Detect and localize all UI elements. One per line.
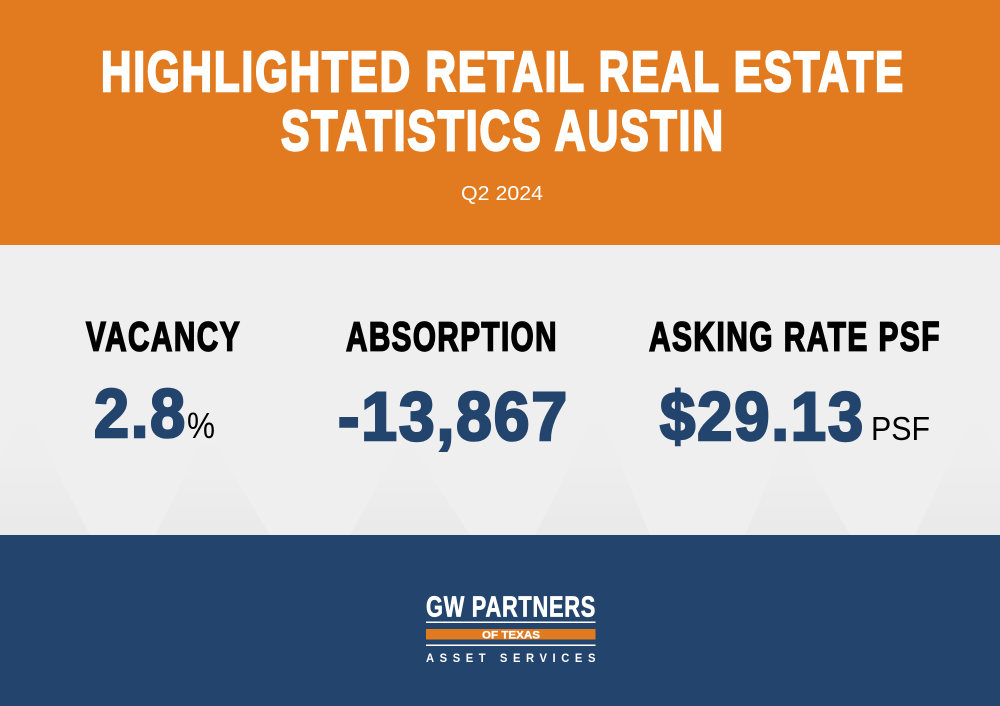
panel: statistics [0,245,1000,535]
absorption value: -13,867 [338,378,569,455]
vacancy unit: % [187,405,215,446]
stat: vacancy [86,314,241,452]
title [101,40,905,163]
panel: footer [0,535,1000,706]
asking rate unit: PSF [871,410,930,447]
logo tagline: ASSET SERVICES [426,651,601,665]
stat: absorption [338,314,569,455]
panel: header [0,0,1000,245]
vacancy value: 2.8 [94,375,187,452]
logo orange band [426,629,596,640]
logo: GW Partners of Texas: OF TEXAS [482,630,540,642]
absorption heading: ABSORPTION [346,314,558,360]
vacancy heading: VACANCY [86,314,241,360]
stat: asking rate [649,314,941,455]
logo wordmark: GW PARTNERS [426,592,596,624]
title: STATISTICS AUSTIN [281,99,725,163]
asking rate value: $29.13 [660,378,865,455]
background triangles [0,410,1000,535]
logo: GW Partners of Texas [426,592,601,665]
date label: Q2 2024 [461,183,543,205]
